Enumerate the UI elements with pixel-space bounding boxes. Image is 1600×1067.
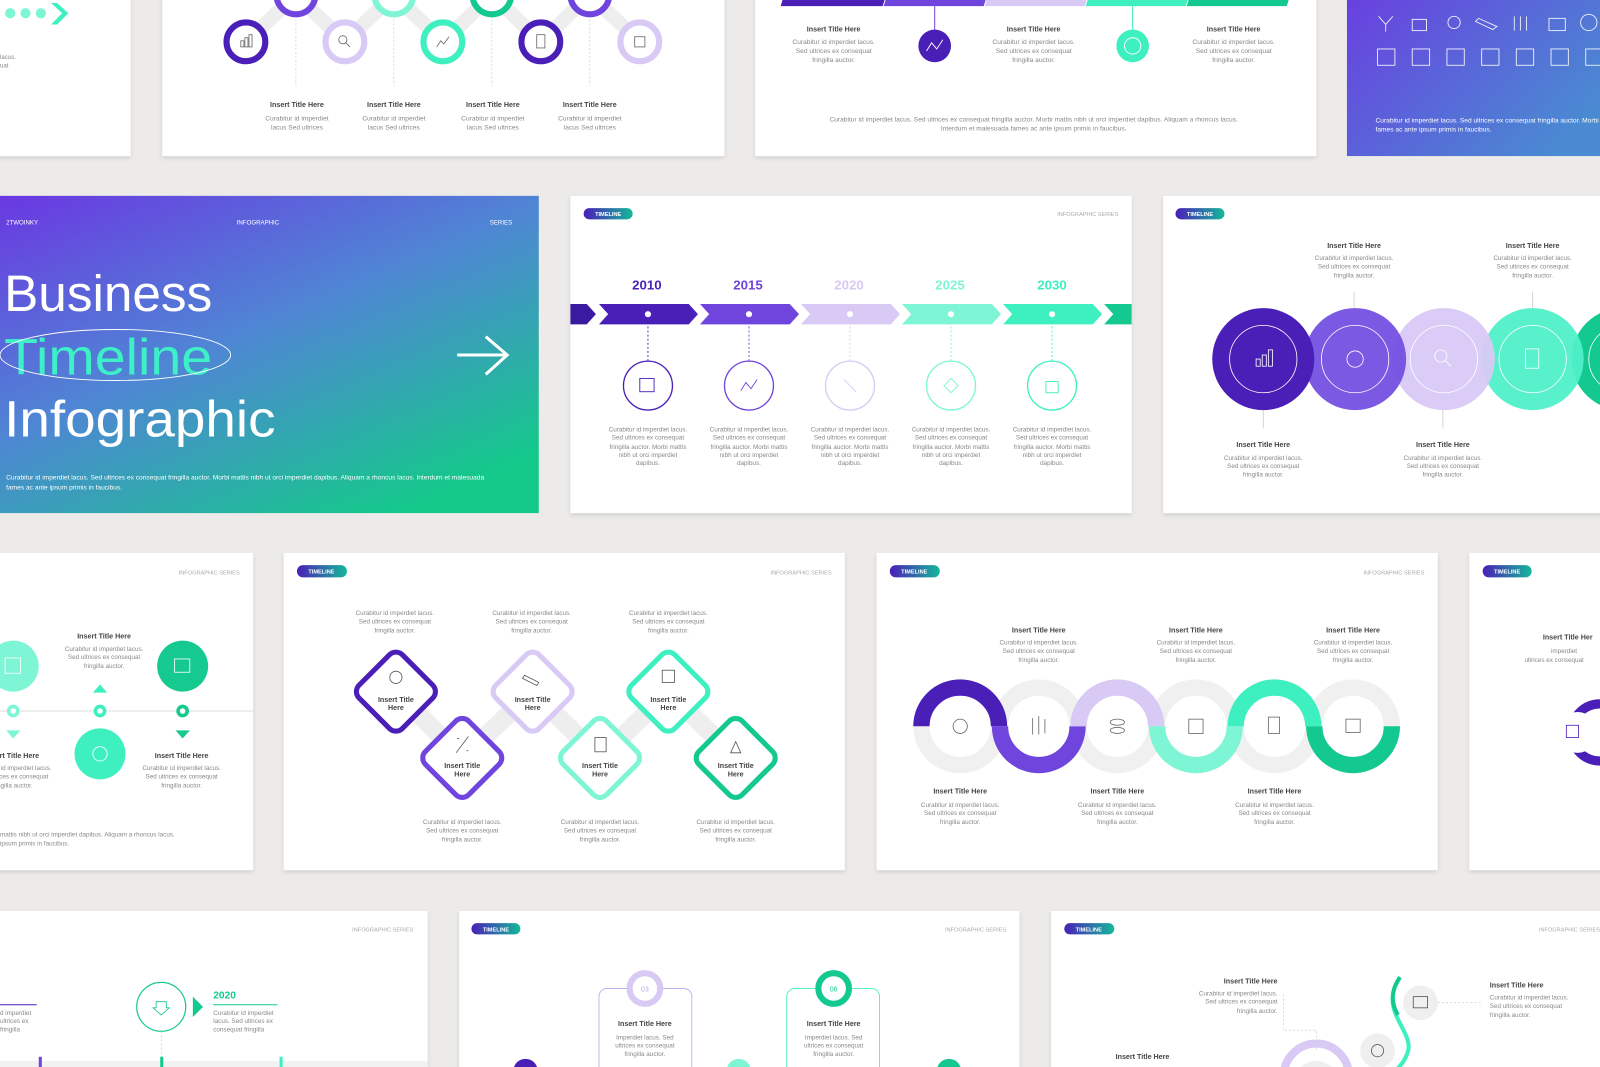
slide: diamond timeline: Curabitur id imperdiet lacus. bbox=[629, 610, 708, 617]
slide: curved timeline (bottom right): Curabitur id imperdiet lacus. bbox=[1490, 995, 1569, 1002]
slide: diamond timeline: fringilla auctor. bbox=[580, 837, 621, 844]
slide: chevron year timeline: dapibus. bbox=[838, 460, 862, 467]
slide: curved timeline (bottom right): Insert Title Here bbox=[1490, 981, 1544, 989]
icon rings row bbox=[227, 22, 659, 61]
text blocks: lacus Sed ultrices bbox=[467, 125, 520, 132]
slide: parallelogram bar timeline: Insert Title Here bbox=[1207, 26, 1261, 34]
years: 2010 bbox=[632, 278, 662, 293]
slide: diamond timeline: Curabitur id imperdiet lacus. bbox=[356, 610, 434, 617]
slide: parallelogram bar timeline: fringilla auctor. bbox=[1012, 57, 1055, 64]
slide: partial right (row 3): ultrices ex consequat bbox=[1524, 657, 1584, 664]
slide: parallelogram bar timeline: fringilla auctor. bbox=[812, 57, 855, 64]
text blocks: Curabitur id imperdiet bbox=[265, 115, 329, 122]
cards: Insert Title Here bbox=[618, 1020, 672, 1028]
years: 2030 bbox=[1037, 278, 1067, 293]
slide: wave timeline: Sed ultrices ex consequat bbox=[1317, 648, 1389, 655]
cards: Imperdiet lacus. Sed bbox=[616, 1034, 674, 1041]
slide: chevron year timeline: nibh ut orci imperdiet bbox=[619, 452, 677, 459]
slide: diamond timeline: Sed ultrices ex consequat bbox=[700, 827, 772, 834]
cards: fringilla auctor. bbox=[625, 1051, 665, 1058]
slide: parallelogram bar timeline: Sed ultrices ex consequat bbox=[796, 48, 872, 55]
cards: Imperdiet lacus. Sed bbox=[805, 1034, 863, 1041]
slide: chevron year timeline: TIMELINE bbox=[595, 212, 622, 218]
slide: diamond timeline: Insert Title bbox=[444, 762, 480, 770]
cards: 06 bbox=[830, 986, 838, 994]
slide: curved timeline (bottom right) bbox=[1051, 911, 1600, 1067]
slide: parallelogram bar timeline: Curabitur id imperdiet lacus. Sed ultrices ex consequat fringilla auctor. Morbi mattis nibh ut orci imperdiet dapibus. Aliquam a rhoncus lacus. bbox=[829, 116, 1238, 123]
slide: overlapping circles: fringilla auctor. bbox=[1512, 272, 1553, 279]
slide: overlapping circles bbox=[1163, 196, 1600, 513]
slide: wave timeline: Insert Title Here bbox=[1090, 788, 1144, 796]
slide: horizontal line with circles (partial left): Sed ultrices ex consequat bbox=[145, 773, 218, 780]
slide: diamond timeline: Curabitur id imperdiet lacus. bbox=[696, 819, 775, 826]
text blocks: lacus Sed ultrices bbox=[368, 125, 421, 132]
slide: overlapping circles: Insert Title Here bbox=[1327, 242, 1381, 250]
slide: horizontal line with circles (partial left): fringilla auctor. bbox=[84, 663, 125, 670]
slide: horizontal line with circles (partial left): INFOGRAPHIC SERIES bbox=[179, 570, 240, 576]
slide: year step timeline (bottom left): consequat fringilla bbox=[213, 1026, 265, 1033]
slide: diamond timeline: Insert Title bbox=[378, 696, 414, 704]
slide: chevron year timeline: dapibus. bbox=[737, 460, 761, 467]
slide: wave timeline: Insert Title Here bbox=[1169, 626, 1223, 634]
slide: curved timeline (bottom right): Sed ultrices ex consequat bbox=[1490, 1003, 1562, 1010]
slide: chevron year timeline: fringilla auctor. Morbi mattis bbox=[610, 444, 686, 451]
icon circles bbox=[623, 361, 1077, 410]
slide: chevron year timeline: fringilla auctor. Morbi mattis bbox=[913, 444, 989, 451]
slide: diamond timeline: Here bbox=[660, 704, 676, 712]
slide: diamond timeline: Curabitur id imperdiet lacus. bbox=[561, 819, 640, 826]
slide: wave timeline: Curabitur id imperdiet lacus. bbox=[999, 640, 1078, 647]
slide: title cover: SERIES bbox=[490, 219, 512, 226]
slide: year step timeline (bottom left): Curabitur id imperdiet bbox=[213, 1010, 274, 1017]
cards: ultrices ex consequat bbox=[615, 1043, 675, 1050]
slide: partial dotted arrow (top left): lacus. bbox=[0, 54, 16, 61]
slide: curved timeline (bottom right): INFOGRAPHIC SERIES bbox=[1539, 927, 1600, 933]
text blocks: lacus Sed ultrices bbox=[271, 125, 324, 132]
slide: wave timeline: Curabitur id imperdiet lacus. bbox=[921, 802, 1000, 809]
slide: overlapping circles: fringilla auctor. bbox=[1243, 471, 1284, 478]
slide: wave timeline: Sed ultrices ex consequat bbox=[1003, 648, 1075, 655]
chevron bar bbox=[570, 304, 1132, 324]
slide: year step timeline (bottom left): ultrices ex bbox=[0, 1018, 29, 1025]
slide: partial dotted arrow (top left): uat bbox=[0, 62, 9, 69]
slide: diamond timeline: TIMELINE bbox=[308, 569, 335, 575]
slide: wave timeline: Insert Title Here bbox=[1012, 626, 1066, 634]
text blocks: Curabitur id imperdiet bbox=[362, 115, 426, 122]
slide: title cover: Curabitur id imperdiet lacus. Sed ultrices ex consequat fringilla auctor. Morbi mattis nibh ut orci imperdiet dapibus. Aliquam a rhoncus lacus. Interdum et malesuada bbox=[6, 474, 484, 481]
slide: overlapping circles: Curabitur id imperdiet lacus. bbox=[1224, 455, 1303, 462]
slide: horizontal line with circles (partial left): fringilla auctor. bbox=[161, 782, 202, 789]
diamonds bbox=[353, 648, 779, 801]
slide: chevron year timeline: fringilla auctor. Morbi mattis bbox=[812, 444, 888, 451]
slide: diamond timeline: Here bbox=[388, 704, 404, 712]
slide: wave timeline: INFOGRAPHIC SERIES bbox=[1363, 570, 1425, 576]
slide: overlapping circles: Curabitur id imperdiet lacus. bbox=[1404, 455, 1482, 462]
slide: partial right (row 3) bbox=[1469, 553, 1600, 870]
slide: curved timeline (bottom right): Curabitur id imperdiet lacus. bbox=[1199, 991, 1278, 998]
slide: card timeline (bottom middle): TIMELINE bbox=[483, 927, 509, 933]
slide: parallelogram bar timeline: Insert Title Here bbox=[807, 26, 861, 34]
slide: chevron year timeline: dapibus. bbox=[636, 460, 660, 467]
slide: chevron year timeline: nibh ut orci imperdiet bbox=[821, 452, 880, 459]
slide: diamond timeline: Sed ultrices ex consequat bbox=[426, 827, 499, 834]
slide: wave timeline: TIMELINE bbox=[901, 569, 928, 575]
text blocks: Curabitur id imperdiet bbox=[461, 115, 525, 122]
title: Infographic bbox=[4, 391, 276, 448]
slide: diamond timeline: Insert Title bbox=[582, 762, 618, 770]
slide: chevron year timeline: nibh ut orci imperdiet bbox=[922, 452, 981, 459]
slide: icon set gradient: Curabitur id imperdiet lacus. Sed ultrices ex consequat fringilla auctor. Morbi bbox=[1376, 117, 1599, 124]
slide: overlapping circles: Insert Title Here bbox=[1236, 441, 1290, 449]
title: Business bbox=[4, 265, 212, 322]
slide: curved timeline (bottom right): Insert Title Here bbox=[1224, 977, 1278, 985]
slide: overlapping circles: Sed ultrices ex consequat bbox=[1496, 263, 1569, 270]
slide: title cover: 2TWOINKY bbox=[6, 219, 38, 226]
slide: overlapping circles: Insert Title Here bbox=[1506, 242, 1560, 250]
slide: chevron year timeline: dapibus. bbox=[1040, 460, 1064, 467]
slide: curved timeline (bottom right): TIMELINE bbox=[1076, 927, 1102, 933]
slide: parallelogram bar timeline bbox=[755, 0, 1316, 156]
slide: wave timeline: Sed ultrices ex consequat bbox=[1081, 810, 1154, 817]
cards: fringilla auctor. bbox=[813, 1051, 854, 1058]
years: 2020 bbox=[834, 278, 864, 293]
slide: card timeline (bottom middle): INFOGRAPHIC SERIES bbox=[945, 927, 1006, 933]
text blocks bbox=[265, 101, 622, 132]
slide: parallelogram bar timeline: Interdum et malesuada fames ac ante ipsum primis in faucibus. bbox=[941, 126, 1127, 133]
slide: chevron year timeline: Curabitur id imperdiet lacus. bbox=[609, 426, 688, 433]
slide: chevron year timeline: dapibus. bbox=[939, 460, 963, 467]
slide: diamond timeline: fringilla auctor. bbox=[648, 627, 689, 634]
slide: chevron year timeline: nibh ut orci imperdiet bbox=[1023, 452, 1082, 459]
slide: diamond timeline: fringilla auctor. bbox=[511, 627, 552, 634]
slide: horizontal line with circles (partial left): mattis nibh ut orci imperdiet dapibus. Aliquam a rhoncus lacus. bbox=[0, 831, 175, 838]
slide: wave timeline: Curabitur id imperdiet lacus. bbox=[1078, 802, 1157, 809]
slide: wave timeline: Insert Title Here bbox=[1326, 626, 1380, 634]
slide: horizontal line with circles (partial left): ipsum primis in faucibus. bbox=[0, 841, 69, 848]
slide: wave timeline: fringilla auctor. bbox=[1333, 657, 1374, 664]
slide: icon set gradient bbox=[1347, 0, 1600, 156]
slide: wave timeline: fringilla auctor. bbox=[1254, 819, 1295, 826]
slide: diamond timeline: Sed ultrices ex consequat bbox=[564, 827, 636, 834]
slide: diamond timeline: Here bbox=[454, 770, 470, 778]
slide: ring zigzag timeline bbox=[162, 0, 724, 156]
slide: diamond timeline: Sed ultrices ex consequat bbox=[359, 618, 431, 625]
milestone circles bbox=[918, 30, 1149, 62]
years bbox=[632, 278, 1067, 293]
slide: icon set gradient: fames ac ante ipsum primis in faucibus. bbox=[1376, 127, 1492, 134]
slide: wave timeline: Sed ultrices ex consequat bbox=[924, 810, 997, 817]
slide: chevron year timeline: Sed ultrices ex consequat bbox=[612, 435, 684, 442]
years: 2015 bbox=[733, 278, 763, 293]
slide: horizontal line with circles (partial left): Sed ultrices ex consequat bbox=[68, 654, 140, 661]
slide: title cover: INFOGRAPHIC bbox=[237, 219, 280, 226]
slide: partial dotted arrow (top left) bbox=[0, 0, 131, 156]
slide: horizontal line with circles (partial left): Insert Title Here bbox=[77, 633, 131, 641]
slide: chevron year timeline bbox=[570, 196, 1132, 513]
slide: diamond timeline: Insert Title bbox=[650, 696, 686, 704]
wave bbox=[921, 688, 1392, 765]
text blocks: Insert Title Here bbox=[563, 101, 617, 109]
slide: overlapping circles: Curabitur id imperdiet lacus. bbox=[1315, 255, 1394, 262]
slide: diamond timeline: Here bbox=[728, 770, 744, 778]
slide: parallelogram bar timeline: Insert Title Here bbox=[1007, 26, 1061, 34]
slide: partial right (row 3): TIMELINE bbox=[1494, 569, 1520, 575]
slide: wave timeline: Curabitur id imperdiet lacus. bbox=[1314, 640, 1393, 647]
slide: diamond timeline: fringilla auctor. bbox=[375, 627, 415, 634]
slide: partial right (row 3): Insert Title Her bbox=[1543, 634, 1593, 642]
arrow bbox=[457, 337, 507, 374]
slide: chevron year timeline: Curabitur id imperdiet lacus. bbox=[710, 426, 789, 433]
slide: diamond timeline: INFOGRAPHIC SERIES bbox=[771, 570, 832, 576]
slide: diamond timeline: Sed ultrices ex consequat bbox=[632, 618, 705, 625]
slide: year step timeline (bottom left) bbox=[0, 911, 428, 1067]
slide: curved timeline (bottom right): Sed ultrices ex consequat bbox=[1205, 999, 1278, 1006]
cards: Insert Title Here bbox=[807, 1020, 861, 1028]
slide: horizontal line with circles (partial left) bbox=[0, 553, 253, 870]
slide: wave timeline: Insert Title Here bbox=[1248, 788, 1301, 796]
title bbox=[0, 265, 276, 448]
slide: curved timeline (bottom right): Insert Title Here bbox=[1116, 1053, 1169, 1061]
slide: overlapping circles: Curabitur id imperdiet lacus. bbox=[1493, 255, 1572, 262]
text blocks: Insert Title Here bbox=[466, 101, 520, 109]
slide: title cover: fames ac ante ipsum primis in faucibus. bbox=[6, 485, 122, 492]
slide: diamond timeline: Here bbox=[525, 704, 541, 712]
slide: parallelogram bar timeline: Curabitur id imperdiet lacus. bbox=[792, 39, 875, 46]
slide: diamond timeline: fringilla auctor. bbox=[442, 837, 483, 844]
slide: overlapping circles: fringilla auctor. bbox=[1423, 471, 1463, 478]
slide: overlapping circles: Sed ultrices ex consequat bbox=[1318, 263, 1390, 270]
slide: overlapping circles: TIMELINE bbox=[1187, 212, 1213, 218]
circles bbox=[1212, 308, 1600, 410]
years: 2025 bbox=[935, 278, 965, 293]
slide: wave timeline: Curabitur id imperdiet lacus. bbox=[1235, 802, 1314, 809]
title: Timeline bbox=[4, 328, 212, 385]
slide: wave timeline: fringilla auctor. bbox=[1018, 657, 1059, 664]
slide: chevron year timeline: fringilla auctor. Morbi mattis bbox=[1014, 444, 1090, 451]
slide: curved timeline (bottom right): fringilla auctor. bbox=[1237, 1008, 1278, 1015]
slide: title cover bbox=[0, 196, 539, 513]
cards: 03 bbox=[641, 986, 649, 994]
slide: chevron year timeline: Sed ultrices ex consequat bbox=[1016, 435, 1088, 442]
slide: curved timeline (bottom right): fringilla auctor. bbox=[1490, 1012, 1531, 1019]
slide: wave timeline: fringilla auctor. bbox=[940, 819, 981, 826]
slide: wave timeline: Sed ultrices ex consequat bbox=[1238, 810, 1311, 817]
slide: wave timeline: fringilla auctor. bbox=[1176, 657, 1217, 664]
text blocks: Insert Title Here bbox=[270, 101, 324, 109]
slide: horizontal line with circles (partial left): Curabitur id imperdiet lacus. bbox=[142, 765, 221, 772]
slide: chevron year timeline: fringilla auctor. Morbi mattis bbox=[711, 444, 787, 451]
slide: year step timeline (bottom left): lacus. Sed ultrices ex bbox=[213, 1018, 274, 1025]
slide: wave timeline: Sed ultrices ex consequat bbox=[1160, 648, 1232, 655]
slide: wave timeline: fringilla auctor. bbox=[1097, 819, 1138, 826]
slide: parallelogram bar timeline: fringilla auctor. bbox=[1212, 57, 1255, 64]
slide: chevron year timeline: Sed ultrices ex consequat bbox=[814, 435, 886, 442]
slide: diamond timeline: Curabitur id imperdiet lacus. bbox=[423, 819, 502, 826]
slide: overlapping circles: Sed ultrices ex consequat bbox=[1227, 463, 1300, 470]
slide: parallelogram bar timeline: Sed ultrices ex consequat bbox=[1196, 48, 1272, 55]
slide: wave timeline: Insert Title Here bbox=[933, 788, 987, 796]
slide: chevron year timeline: INFOGRAPHIC SERIES bbox=[1057, 212, 1119, 218]
slide: chevron year timeline: Curabitur id imperdiet lacus. bbox=[1013, 426, 1092, 433]
slide: diamond timeline: Insert Title bbox=[718, 762, 754, 770]
slide: chevron year timeline: Curabitur id imperdiet lacus. bbox=[912, 426, 991, 433]
slide: year step timeline (bottom left): 2020 bbox=[213, 991, 236, 1002]
text blocks: Curabitur id imperdiet bbox=[558, 115, 622, 122]
slide: year step timeline (bottom left): INFOGRAPHIC SERIES bbox=[352, 927, 414, 933]
slide: chevron year timeline: Curabitur id imperdiet lacus. bbox=[811, 426, 890, 433]
slide: overlapping circles: Sed ultrices ex consequat bbox=[1407, 463, 1479, 470]
slide: diamond timeline: fringilla auctor. bbox=[715, 837, 756, 844]
slide: partial right (row 3): imperdiet bbox=[1551, 648, 1577, 655]
slide: chevron year timeline: Sed ultrices ex consequat bbox=[915, 435, 987, 442]
slide: overlapping circles: fringilla auctor. bbox=[1334, 272, 1375, 279]
slide: diamond timeline: Here bbox=[592, 770, 608, 778]
slide: diamond timeline: Curabitur id imperdiet lacus. bbox=[492, 610, 571, 617]
slide: card timeline (bottom middle) bbox=[459, 911, 1019, 1067]
slide: diamond timeline: Insert Title bbox=[515, 696, 551, 704]
slide: wave timeline bbox=[877, 553, 1438, 870]
slide: parallelogram bar timeline: Sed ultrices ex consequat bbox=[996, 48, 1072, 55]
slide: parallelogram bar timeline: Curabitur id imperdiet lacus. bbox=[992, 39, 1075, 46]
cards bbox=[599, 973, 880, 1067]
text blocks: lacus Sed ultrices bbox=[564, 125, 616, 132]
slide: year step timeline (bottom left): fringilla bbox=[0, 1026, 20, 1033]
slide: horizontal line with circles (partial left): Curabitur id imperdiet lacus. bbox=[65, 646, 144, 653]
cards: ultrices ex consequat bbox=[804, 1043, 864, 1050]
slide: overlapping circles: Insert Title Here bbox=[1416, 441, 1470, 449]
slide: wave timeline: Curabitur id imperdiet lacus. bbox=[1157, 640, 1235, 647]
slide: diamond timeline bbox=[284, 553, 845, 870]
slide: chevron year timeline: Sed ultrices ex consequat bbox=[713, 435, 785, 442]
slide: parallelogram bar timeline: Curabitur id imperdiet lacus. bbox=[1192, 39, 1275, 46]
slide: diamond timeline: Sed ultrices ex consequat bbox=[495, 618, 568, 625]
text blocks: Insert Title Here bbox=[367, 101, 421, 109]
slide: chevron year timeline: nibh ut orci imperdiet bbox=[720, 452, 779, 459]
slide: horizontal line with circles (partial left): Insert Title Here bbox=[155, 752, 209, 760]
slide: year step timeline (bottom left): d imperdiet bbox=[0, 1010, 31, 1017]
